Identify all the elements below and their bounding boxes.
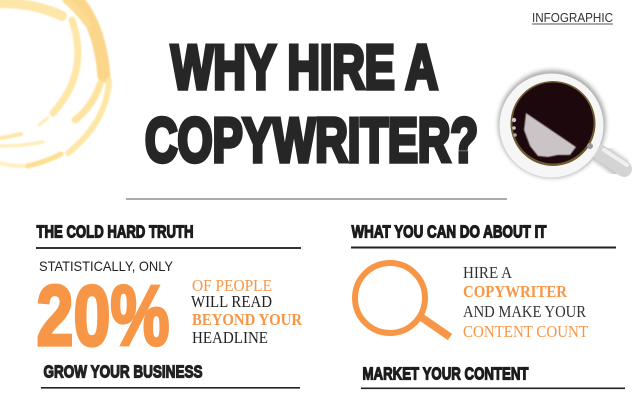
title: WHY HIRE A <box>171 34 438 102</box>
text: of people will read beyond your headline: WILL READ <box>191 292 272 311</box>
text: hire a copywriter: CONTENT COUNT <box>463 322 588 341</box>
text: of people will read beyond your headline: BEYOND YOUR <box>192 310 303 329</box>
title <box>145 34 478 176</box>
coffee surface reflection <box>524 113 576 157</box>
heading: the cold hard truth: THE COLD HARD TRUTH <box>36 222 194 242</box>
text: of people will read beyond your headline: OF PEOPLE <box>192 276 272 295</box>
icon: coffee cup <box>498 70 627 178</box>
text: hire a copywriter: AND MAKE YOUR <box>463 302 586 321</box>
stat: 20 percent: 20% <box>36 269 170 364</box>
panel: what you can do about it <box>351 222 616 341</box>
title: COPYWRITER? <box>145 106 478 176</box>
text: of people will read beyond your headline <box>191 276 303 347</box>
text: hire a copywriter: COPYWRITER <box>463 282 568 301</box>
panel: the cold hard truth <box>36 222 303 364</box>
text: statistically only: STATISTICALLY, ONLY <box>39 258 174 274</box>
label: infographic: INFOGRAPHIC <box>532 11 613 25</box>
heading: what you can do about it: WHAT YOU CAN DO ABOUT IT <box>352 222 547 242</box>
divider <box>126 198 507 200</box>
icon: coffee ring stain <box>0 0 109 166</box>
panel: market your content: MARKET YOUR CONTENT <box>362 364 529 384</box>
text: hire a copywriter <box>463 263 588 341</box>
text: hire a copywriter: HIRE A <box>463 263 512 282</box>
icon: magnifying glass <box>355 263 450 337</box>
text: of people will read beyond your headline: HEADLINE <box>192 328 268 347</box>
panel: grow your business: GROW YOUR BUSINESS <box>44 362 202 382</box>
